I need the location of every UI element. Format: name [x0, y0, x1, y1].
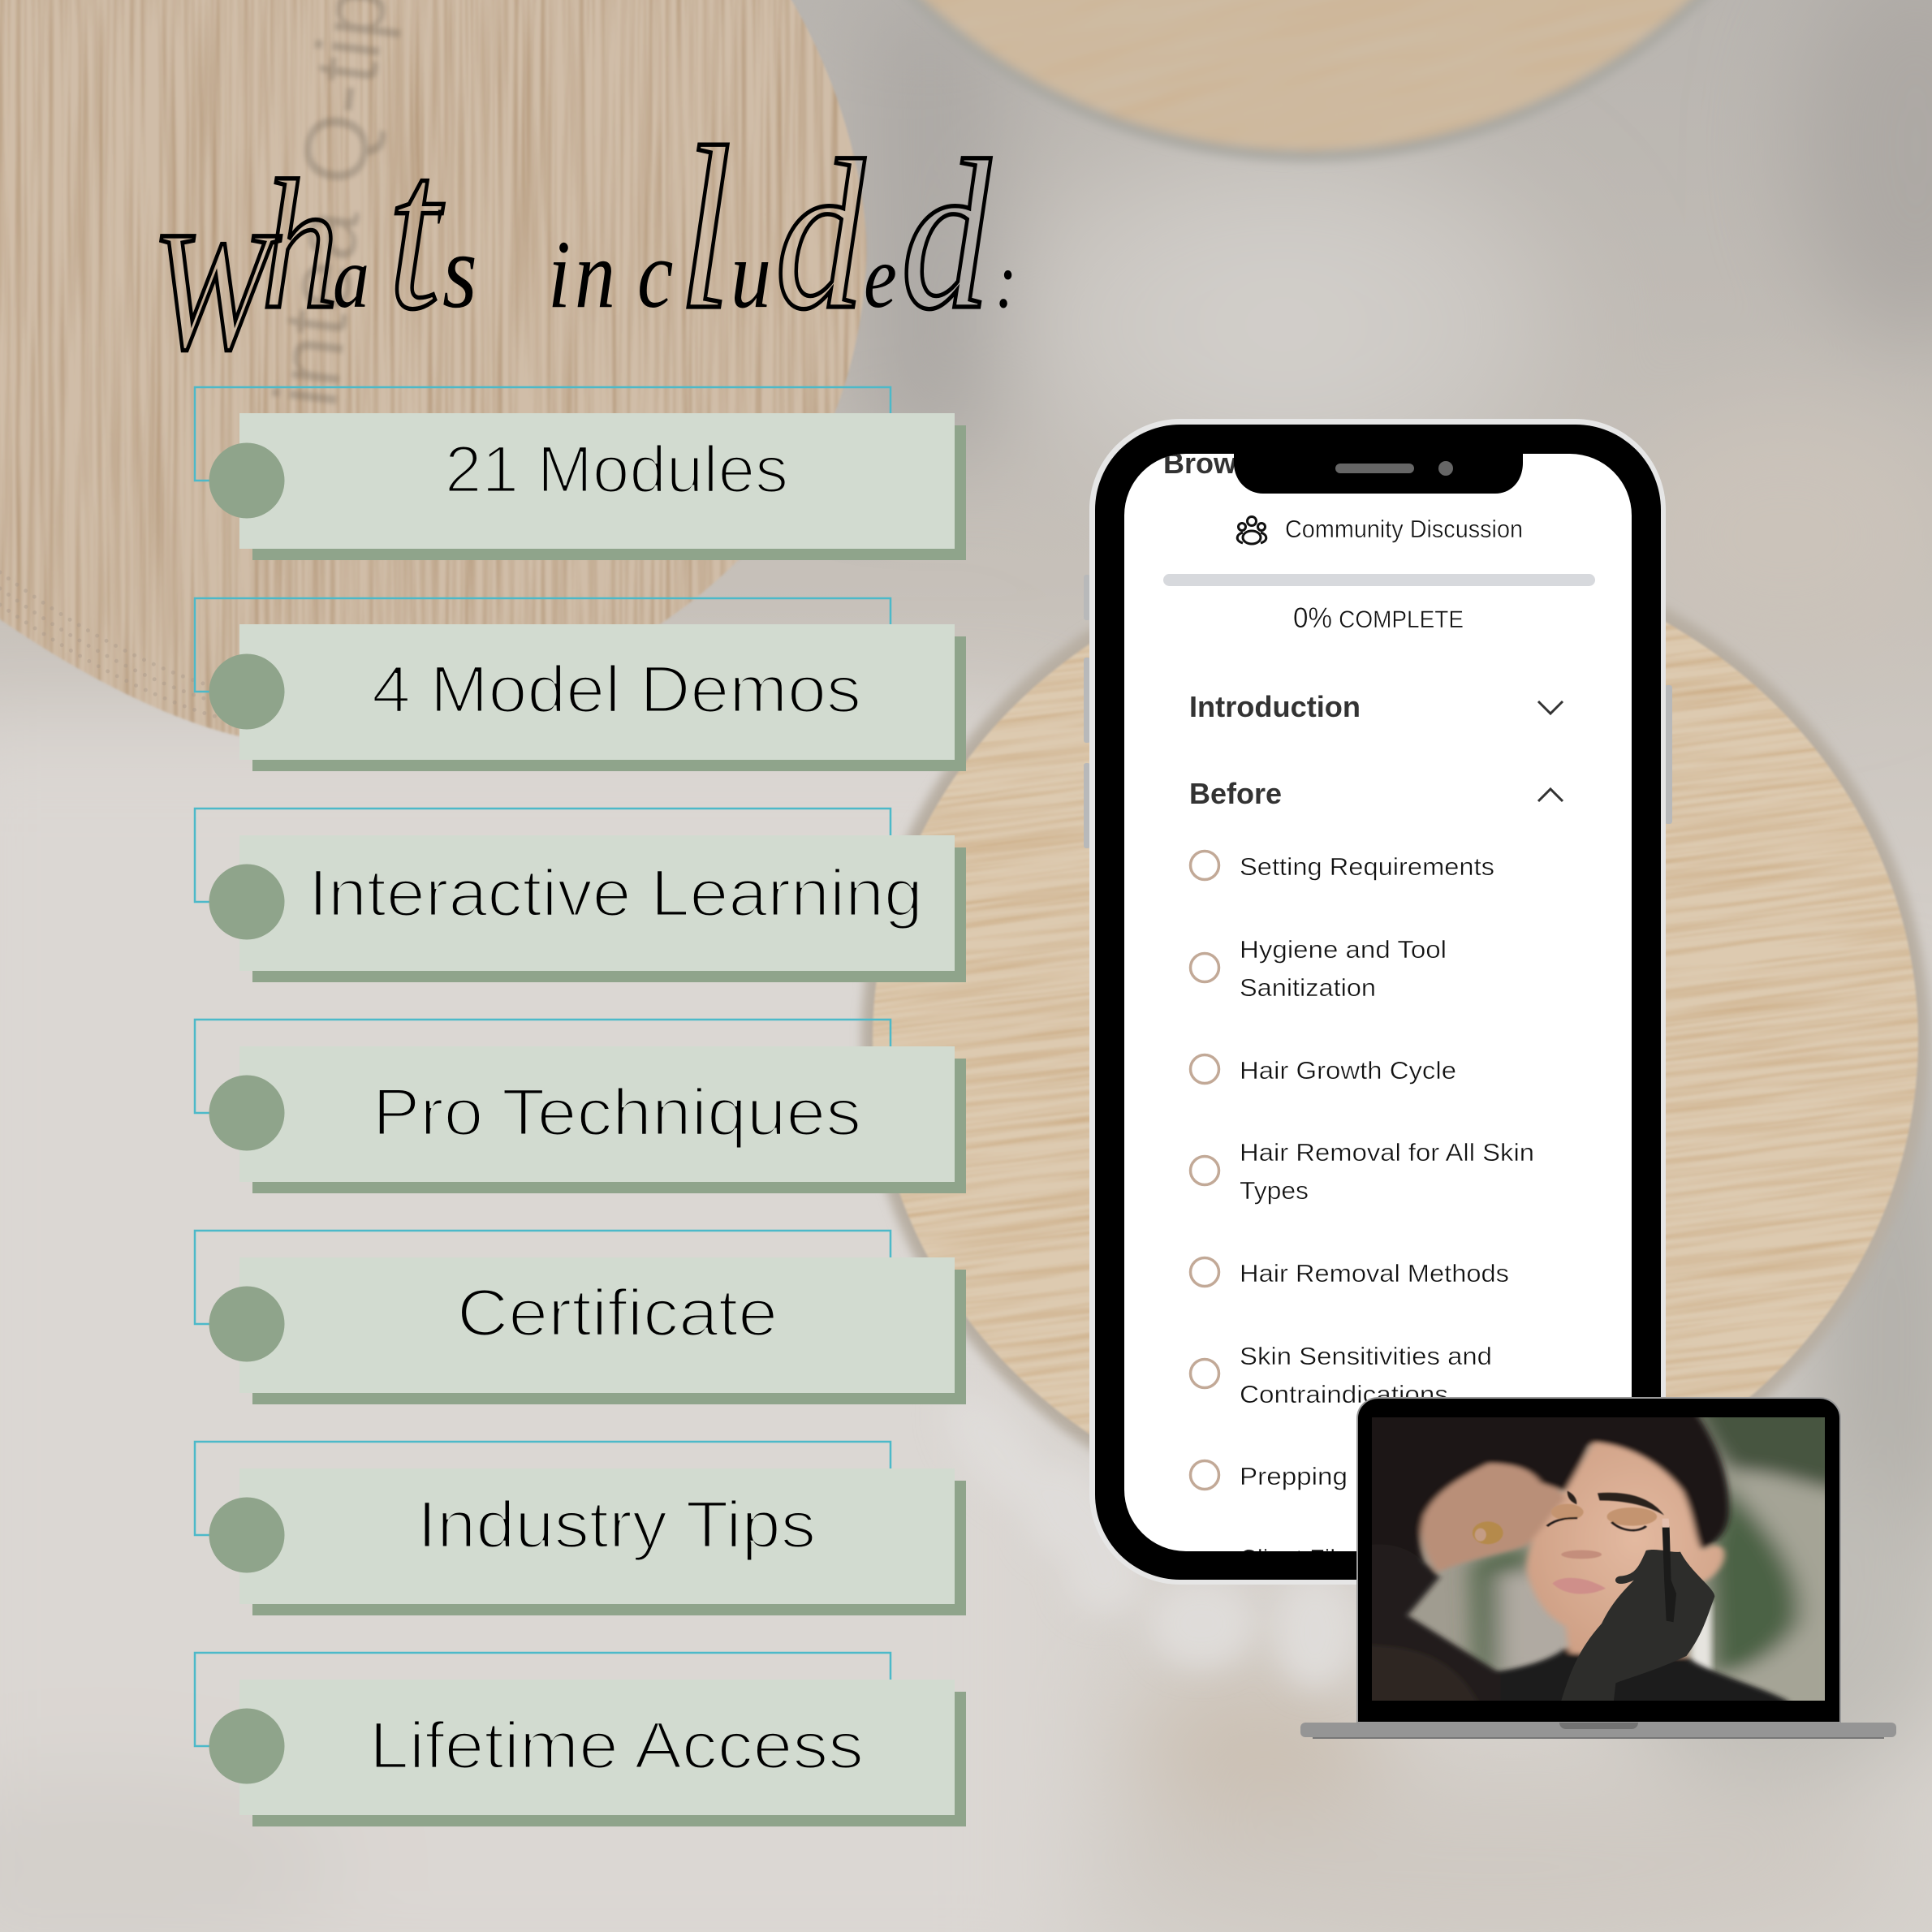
lesson: Hair Removal Methods: Hair Removal Methods	[1240, 1259, 1509, 1287]
icon: community group	[1237, 516, 1266, 544]
title: W	[152, 196, 281, 385]
list item: Lifetime Access	[195, 1653, 966, 1826]
phone side buttons	[1084, 575, 1672, 848]
list item: Interactive Learning: Interactive Learning	[308, 856, 923, 930]
title: '	[432, 197, 443, 261]
title: t	[388, 107, 444, 356]
list item: Pro Techniques	[195, 1020, 966, 1193]
section: Introduction	[1189, 690, 1563, 723]
lesson: Hair Removal for All Skin Types: Types	[1240, 1176, 1309, 1205]
lashes	[1611, 1522, 1646, 1530]
technician hair	[1348, 1404, 1600, 1662]
title: :	[995, 238, 1017, 325]
lesson: Skin Sensitivities and Contraindications: Contraindications	[1240, 1380, 1448, 1408]
lesson: Hygiene and Tool Sanitization: Sanitization	[1240, 973, 1376, 1002]
list item: Certificate	[195, 1231, 966, 1404]
laptop hinge notch	[1559, 1723, 1638, 1729]
lesson: Hygiene and Tool Sanitization: Hygiene and Tool	[1240, 935, 1447, 964]
section: Before: Before	[1189, 777, 1282, 810]
lesson: partially hidden row: Client File	[1240, 1544, 1349, 1572]
engraved lid lettering: intea Q-tip	[256, 0, 406, 412]
nose shadow	[1561, 1550, 1602, 1559]
lesson: Skin Sensitivities and Contraindications	[1190, 1342, 1492, 1408]
list item: 4 Model Demos	[195, 598, 966, 771]
phone speaker	[1335, 464, 1414, 473]
section: Introduction: Introduction	[1189, 690, 1361, 723]
list item: Industry Tips	[195, 1442, 966, 1615]
title: u	[731, 221, 771, 328]
title	[152, 100, 1017, 385]
model hair	[1589, 1404, 1729, 1553]
lesson: Hair Removal for All Skin Types	[1190, 1138, 1534, 1205]
list item: Industry Tips: Industry Tips	[417, 1488, 816, 1562]
title: i	[548, 221, 571, 328]
list item: 4 Model Demos: 4 Model Demos	[372, 653, 861, 727]
phone mockup	[1084, 419, 1672, 1591]
title: s	[442, 213, 477, 330]
lesson: Hair Removal for All Skin Types: Hair Removal for All Skin	[1240, 1138, 1534, 1167]
laptop lid	[1357, 1398, 1840, 1723]
model face and neck	[1527, 1443, 1724, 1658]
list item: Certificate: Certificate	[457, 1276, 778, 1350]
eyebrow	[1598, 1493, 1664, 1516]
technician neck	[1421, 1458, 1565, 1572]
phone screen	[1124, 446, 1632, 1591]
lesson: Prepping	[1190, 1461, 1348, 1490]
title: c	[637, 221, 673, 328]
left bamboo lid	[0, 0, 866, 737]
section: Before	[1189, 777, 1563, 810]
title: l	[678, 100, 732, 358]
phone notch	[1234, 454, 1523, 494]
brow pencil	[1662, 1526, 1676, 1622]
bamboo end-grain dots along the left lid edge	[0, 572, 239, 722]
laptop video photo: brow artist at work	[1348, 1396, 1848, 1715]
lesson: partially hidden row	[1190, 1544, 1349, 1591]
black gloved hand	[1561, 1550, 1714, 1701]
backdrop plants and panel	[1687, 1404, 1848, 1715]
list item: 21 Modules: 21 Modules	[445, 433, 788, 507]
lesson: Hygiene and Tool Sanitization	[1190, 935, 1447, 1002]
lesson: Hair Growth Cycle: Hair Growth Cycle	[1240, 1056, 1456, 1085]
earring	[1473, 1521, 1503, 1544]
title: a	[333, 228, 369, 326]
light cotton blotches	[927, 1376, 1356, 1688]
laptop base	[1313, 1729, 1884, 1739]
list item: Interactive Learning	[195, 809, 966, 982]
lesson: Setting Requirements: Setting Requirements	[1240, 852, 1494, 881]
title: d	[901, 115, 991, 354]
list item: Pro Techniques: Pro Techniques	[373, 1076, 861, 1149]
list item: 21 Modules	[195, 387, 966, 560]
eyelid shadow	[1606, 1507, 1657, 1526]
title: e	[864, 226, 897, 326]
icon: chevron down	[1538, 701, 1563, 714]
laptop mockup	[1300, 1396, 1896, 1739]
technician turtleneck	[1356, 1544, 1501, 1715]
community discussion row: Community Discussion	[1285, 515, 1523, 543]
page heading fragment: Brow	[1163, 446, 1237, 480]
phone body	[1089, 419, 1666, 1585]
lesson: Prepping: Prepping	[1240, 1462, 1348, 1490]
icon: chevron up	[1538, 789, 1563, 801]
lesson: Skin Sensitivities and Contraindications: Skin Sensitivities and	[1240, 1342, 1492, 1370]
title: d	[775, 115, 865, 354]
glass rim under the lower bamboo lid	[861, 539, 1930, 1539]
list item: Lifetime Access: Lifetime Access	[369, 1709, 864, 1783]
title: h	[261, 143, 339, 347]
lower bamboo lid	[755, 425, 1932, 1653]
lips	[1552, 1578, 1606, 1594]
upper bamboo lid	[628, 0, 1932, 269]
phone camera	[1438, 461, 1453, 476]
model top	[1489, 1648, 1788, 1715]
title: n	[575, 221, 615, 328]
progress bar	[1163, 574, 1595, 586]
progress label: 0% COMPLETE	[1293, 602, 1464, 634]
technician lower hair	[1348, 1645, 1485, 1715]
